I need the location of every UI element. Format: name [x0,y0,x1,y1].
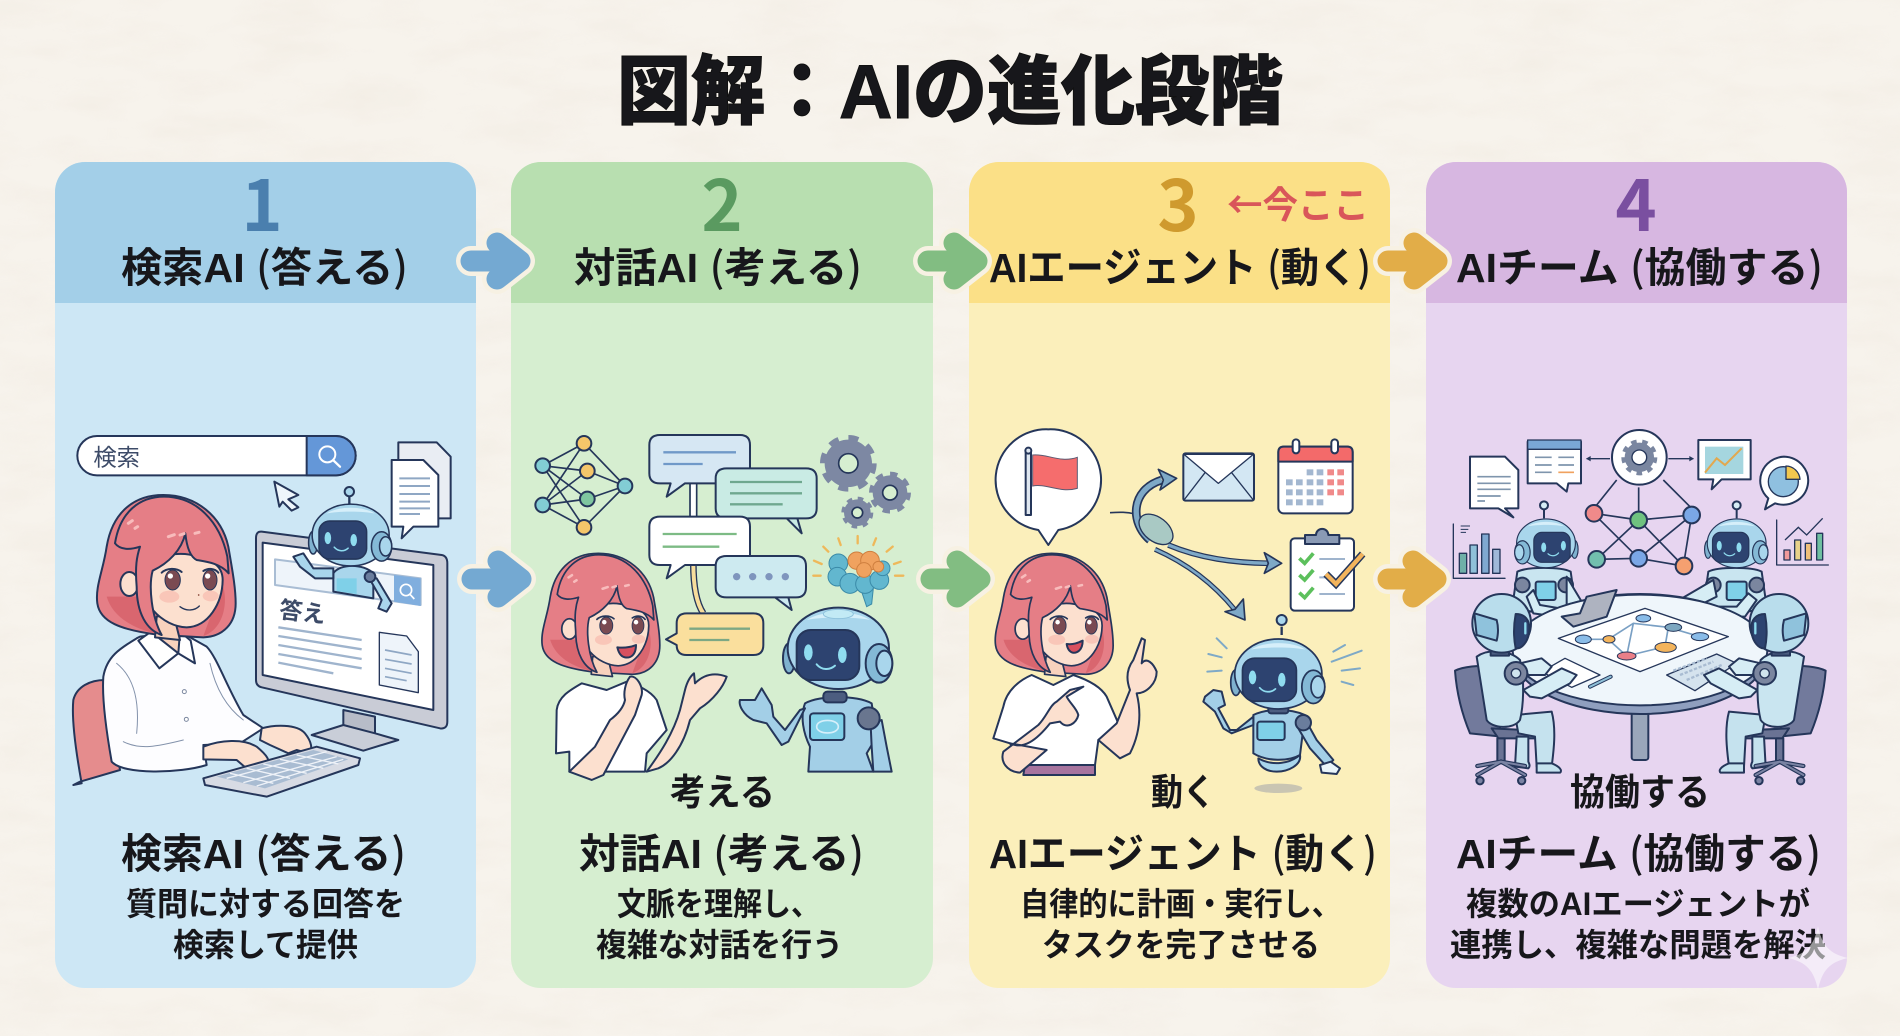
document icons [392,442,451,538]
panel 3 header [969,162,1390,303]
panel 3 description [1020,886,1341,963]
panel 1 caption: 検索AI (答える) [121,820,406,880]
speech bubbles [649,435,817,655]
panel 4 body [1426,162,1847,988]
flag speech bubble [996,429,1101,545]
panel 4 description: 複数のAIエージェントが [1466,886,1810,922]
monitor: 答え [278,596,327,628]
robot [1203,615,1362,793]
robot [293,487,392,612]
panel 1 description: 質問に対する回答を [126,886,405,922]
panel 1: 検索AI [55,151,476,988]
panel 2 caption: 対話AI (考える) [579,820,864,880]
bar chart left [1453,524,1505,578]
laptop [1562,590,1617,627]
current position marker: ←今ここ [1227,175,1369,229]
panel 1 header [55,162,476,303]
robot [740,608,892,772]
cursor icon [274,482,298,511]
arrow: header 3 to 4 [1388,243,1437,279]
keyboard [203,747,360,797]
panel 4 illustration [1453,430,1828,784]
woman [993,553,1157,775]
envelope icon [1183,453,1254,501]
panel 2 description: 複雑な対話を行う [596,927,843,963]
panel 2 illustration [535,435,908,780]
panel 3 caption: AIエージェント (動く) [989,820,1377,880]
arrow: header 1 to 2 [471,243,520,279]
woman head [97,495,236,640]
pie chart bubble [1760,457,1808,509]
panel 1 description: 検索して提供 [173,927,358,963]
panel 2 body [511,162,933,988]
panel 3 sublabel: 動く [1151,772,1215,813]
woman [542,553,727,780]
panel 2 header [511,162,933,303]
calendar icon [1278,439,1353,513]
panel 4 description: 連携し、複雑な問題を解決 [1450,927,1826,963]
panel 2 sublabel: 考える [670,772,775,813]
panel 2 description: 文脈を理解し、 [617,886,820,922]
panel 4 sublabel: 協働する [1570,772,1710,813]
workflow arrows [1110,469,1282,620]
checklist icon [1291,529,1363,611]
panel 3 description: 自律的に計画・実行し、 [1020,886,1341,922]
network diagram [1586,480,1700,574]
panel 4 caption: AIチーム (協働する) [1456,820,1821,880]
panel 3: AIエージェント [969,151,1390,988]
back-left robot [1512,501,1582,617]
arrow: illustration 3 to 4 [1388,561,1436,597]
panel 2 number: 2 [701,151,743,252]
monitor [256,532,447,751]
panel 1 description [126,886,405,963]
panel 3 illustration [993,429,1363,793]
central gear [1586,430,1694,485]
search bar: 検索 [93,444,140,470]
brain icon [813,536,903,607]
panel 4 description [1450,886,1826,963]
meeting table [1513,594,1767,760]
panel 2: 対話AI [511,151,933,988]
browser window bubble [1528,440,1581,492]
gears icon [824,439,908,526]
panel 4 header [1426,162,1847,303]
panel 4 heading: AIチーム (協働する) [1456,234,1823,294]
neural network icon [535,436,632,535]
arrow: header 2 to 3 [928,243,977,279]
woman at keyboard [103,630,311,771]
front-left robot [1455,594,1577,784]
title: 図解：AIの進化段階 [617,50,1283,135]
line chart right [1777,518,1828,565]
panel 4 number: 4 [1615,151,1657,252]
panel 3 description: タスクを完了させる [1042,927,1320,963]
panel 2 description [596,886,843,963]
panel 1 illustration [73,436,451,797]
panel 1 body [55,162,476,988]
back-right robot [1673,501,1768,617]
panel 2 heading: 対話AI (考える) [574,234,862,294]
panel 3 body [969,162,1390,988]
front-right robot [1704,594,1826,784]
office chair [73,680,120,785]
panel 3 number: 3 [1157,151,1199,252]
chart bubble [1698,440,1751,489]
panel 4: AIチーム [1426,151,1848,990]
document bubble [1470,457,1518,517]
arrow: illustration 2 to 3 [931,561,980,597]
sparkle watermark [1788,926,1848,990]
search bar [77,436,356,475]
panel 3 heading: AIエージェント (動く) [989,234,1371,294]
panel 1 heading: 検索AI (答える) [121,234,408,294]
arrow: illustration 1 to 2 [472,561,521,597]
panel 1 number: 1 [241,151,283,252]
